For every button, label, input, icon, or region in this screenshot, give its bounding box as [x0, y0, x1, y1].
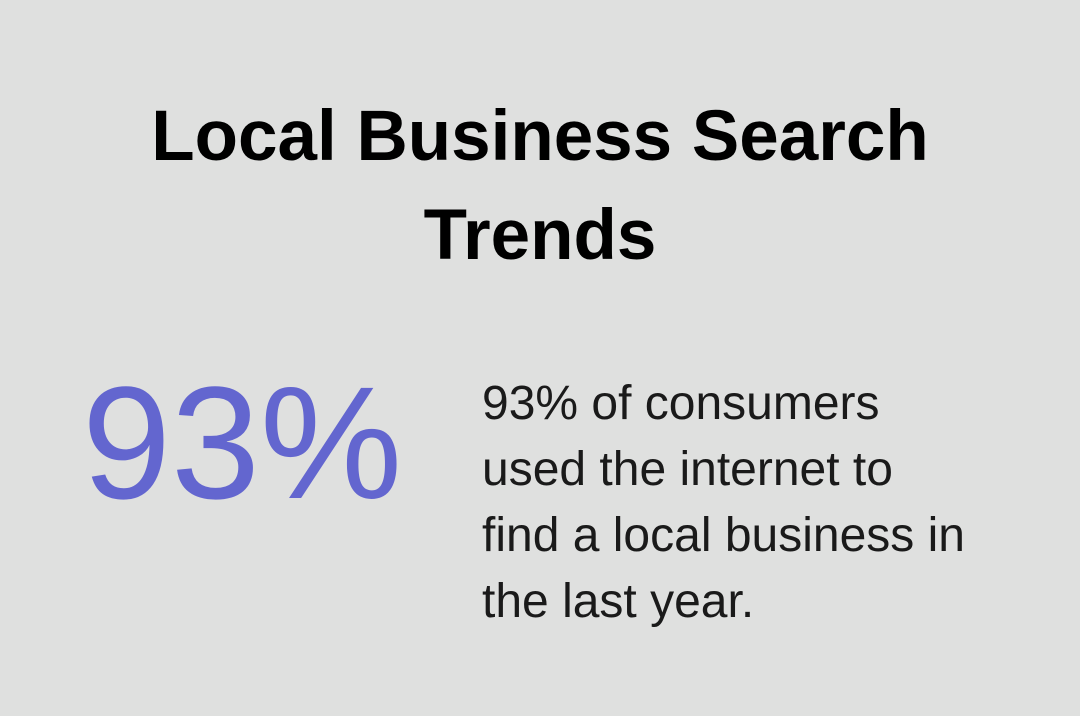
description text — [482, 377, 965, 628]
description text: the last year. — [482, 575, 754, 628]
description text: used the internet to — [482, 443, 893, 496]
description text: 93% of consumers — [482, 377, 880, 430]
title: Local Business Search — [151, 97, 929, 176]
title — [151, 97, 929, 275]
description text: find a local business in — [482, 509, 965, 562]
title: Trends — [424, 196, 656, 275]
big stat number: 93% — [82, 353, 402, 532]
